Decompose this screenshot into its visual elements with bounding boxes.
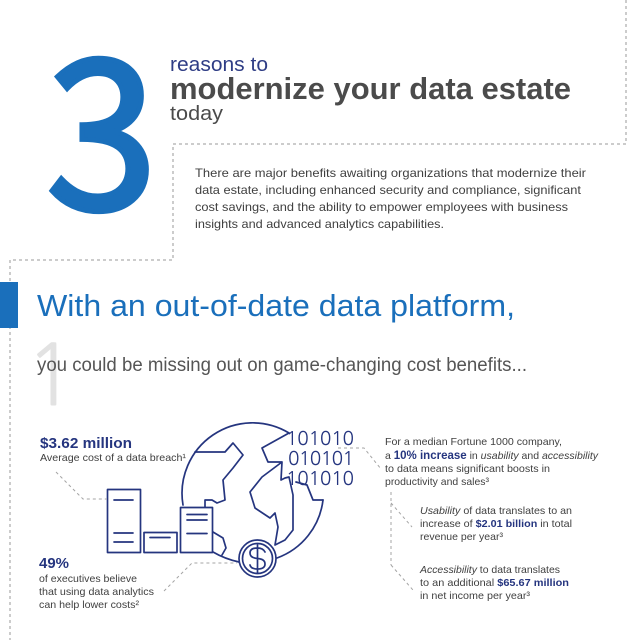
title: modernize your data estate: [170, 71, 571, 106]
text: accessibility: [419, 564, 569, 602]
section marker bar: [0, 282, 18, 328]
stat: executives: 49%: [39, 556, 69, 572]
text: usability: increase of $2.01 billion in total: [420, 518, 572, 530]
text: usability: revenue per year³: [420, 531, 503, 543]
text: usability: Usability of data translates to an: [420, 505, 572, 517]
title: [170, 54, 571, 125]
section subheading: you could be missing out on game-changing cost benefits...: [37, 355, 527, 376]
server small: [144, 532, 177, 552]
stat: executives: [39, 556, 154, 611]
binary digits: 101010: [286, 469, 354, 488]
title: reasons to: [170, 54, 268, 76]
stat: executives: of executives believe: [39, 573, 137, 585]
stat: executives: can help lower costs²: [39, 599, 139, 611]
stat: breach cost: [40, 436, 187, 464]
text: Fortune 1000: a 10% increase in usability and accessibility: [385, 450, 599, 462]
text: accessibility: Accessibility to data translates: [419, 564, 560, 576]
binary digits: 101010: [286, 429, 354, 448]
intro text block: insights and advanced analytics capabilities.: [195, 217, 444, 231]
text: Fortune 1000: productivity and sales³: [385, 476, 489, 488]
dashed connector lines: [56, 448, 413, 591]
stat: breach cost: Average cost of a data breach¹: [40, 452, 187, 464]
intro text block: [195, 166, 586, 231]
text: Fortune 1000: to data means significant boosts in: [385, 463, 550, 475]
server tall: [108, 490, 140, 552]
binary digits: 010101: [288, 449, 354, 468]
server medium: [180, 508, 212, 552]
intro text block: There are major benefits awaiting organizations that modernize their: [195, 166, 586, 180]
section heading: With an out-of-date data platform,: [37, 288, 515, 323]
globe outline: [182, 423, 323, 562]
title: today: [170, 103, 223, 125]
text: Fortune 1000: [385, 436, 599, 488]
stat: executives: that using data analytics: [39, 586, 154, 598]
text: usability: [420, 505, 572, 543]
text: Fortune 1000: For a median Fortune 1000 company,: [385, 436, 562, 448]
text: accessibility: to an additional $65.67 million: [420, 577, 569, 589]
watermark numeral 1: 1: [25, 333, 77, 418]
continents: [195, 433, 323, 555]
text: accessibility: in net income per year³: [420, 590, 531, 602]
intro text block: data estate, including enhanced security and compliance, significant: [195, 183, 582, 197]
binary digits: [286, 429, 354, 488]
dollar coin: [239, 540, 276, 577]
illustration: globe with servers, binary and coin: [108, 423, 323, 577]
stat: breach cost: $3.62 million: [40, 436, 132, 452]
intro text block: cost savings, and the ability to empower employees with business: [195, 200, 568, 214]
